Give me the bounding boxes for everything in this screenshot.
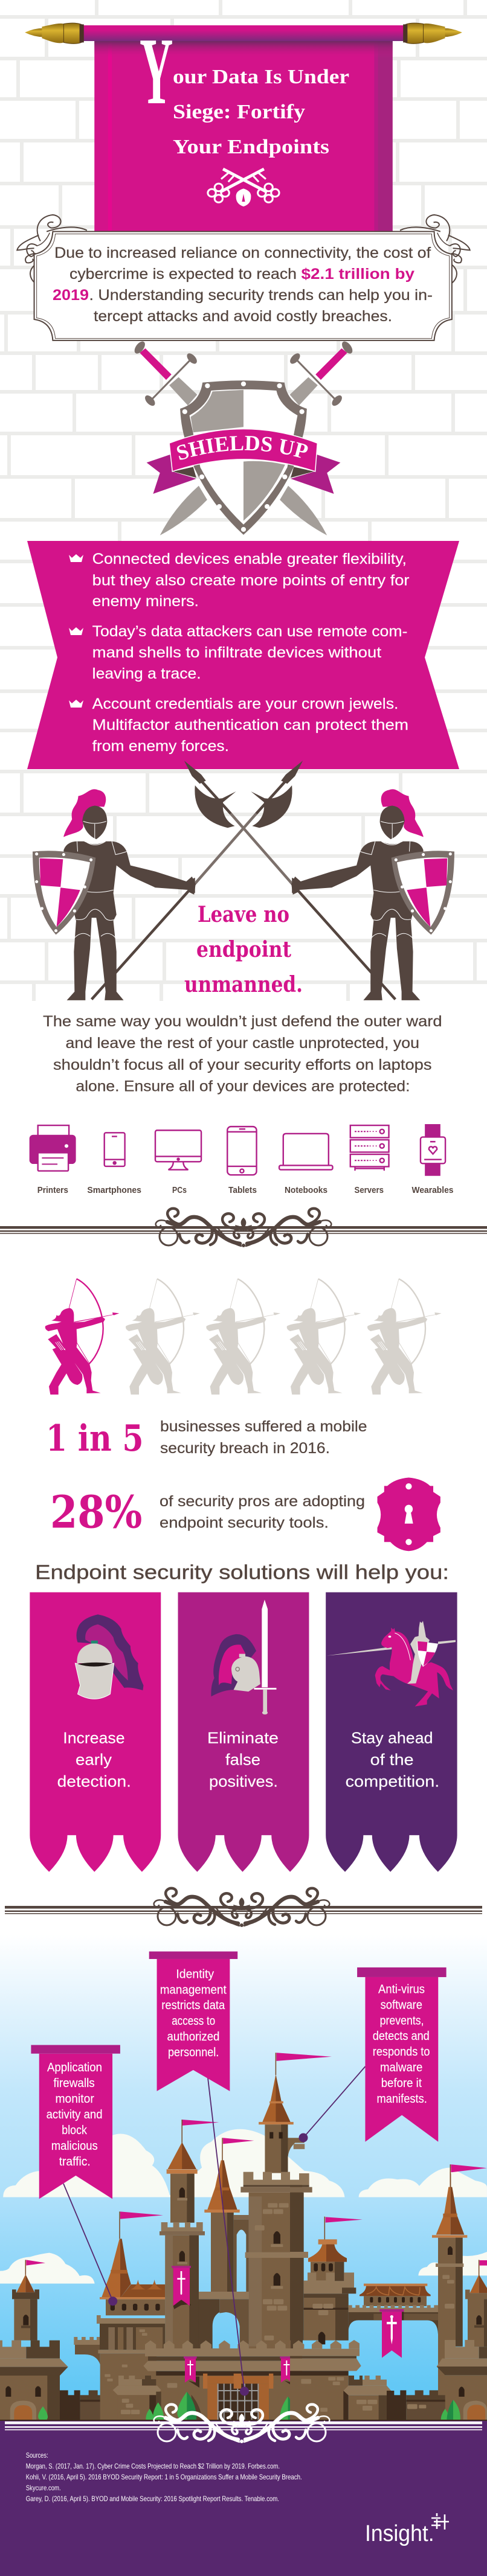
icon: wearable — [421, 1124, 445, 1176]
sky background — [0, 1935, 487, 2421]
frame — [34, 232, 452, 340]
panel: increase early detection — [30, 1593, 161, 1872]
callout: anti-virus: detects and — [373, 2030, 430, 2043]
trees — [146, 2392, 296, 2421]
side turret — [74, 2337, 100, 2345]
stat: 1 in 5: 1 in 5 — [46, 1417, 144, 1460]
title: our Data Is Under — [173, 66, 349, 88]
callout: identity management: management — [160, 1984, 227, 1997]
callout: application firewalls: traffic. — [59, 2155, 91, 2169]
banner text: positives. — [209, 1772, 278, 1791]
callout: anti-virus: software — [381, 1998, 422, 2012]
heading: endpoint solutions: Endpoint security solutions will help you: — [35, 1561, 449, 1583]
text block: defend devices — [43, 1013, 442, 1095]
Insight logo: Insight. — [365, 2521, 434, 2546]
callout: application firewalls: block — [62, 2124, 88, 2137]
callout: anti-virus: Anti-virus — [378, 1983, 425, 1996]
title: Your Endpoints — [173, 136, 329, 158]
device labels: Smartphones — [87, 1186, 141, 1195]
heading: leave no endpoint unmanned — [184, 902, 303, 997]
banner text: Eliminate — [207, 1729, 279, 1747]
main tower side — [299, 2173, 309, 2185]
callout: application firewalls: Application — [47, 2061, 102, 2074]
icon: servers — [350, 1125, 389, 1171]
brick wall lower fade cover — [0, 1001, 487, 1013]
hall spire and roof — [119, 2211, 120, 2239]
banner text: detection. — [57, 1772, 131, 1791]
stat: 28% — [50, 1486, 365, 1538]
stat: 28%: 28% — [50, 1486, 142, 1538]
banner text — [57, 1729, 131, 1791]
right knight — [184, 761, 454, 1000]
ornamental divider 2 — [5, 1888, 482, 1927]
callout: application firewalls: activity and — [47, 2108, 103, 2121]
hall body — [97, 2315, 165, 2324]
bullet 3: Account credentials are your crown jewels. — [92, 695, 398, 712]
device labels — [37, 1186, 453, 1195]
icon: smartphone — [105, 1133, 125, 1166]
callout: application firewalls: firewalls — [53, 2077, 95, 2090]
text block: defend devices: The same way you wouldn’t just defend the outer ward — [43, 1013, 442, 1030]
bullet 3 — [69, 695, 408, 755]
ribbon — [147, 429, 340, 494]
heading: leave no endpoint unmanned: endpoint — [196, 937, 291, 962]
title: Siege: Fortify — [173, 101, 305, 123]
bullet 1: Connected devices enable greater flexibility, — [92, 551, 407, 567]
sources: Sources: — [26, 2451, 48, 2459]
bullet 1: enemy miners. — [92, 593, 199, 610]
callout: anti-virus: before it — [381, 2077, 422, 2090]
bullet 3: from enemy forces. — [92, 738, 229, 755]
stat: 1 in 5 — [46, 1417, 367, 1460]
corner ornaments — [17, 215, 470, 283]
callout: identity management: access to — [172, 2015, 215, 2028]
icon: crossed keys — [208, 169, 279, 206]
left knight — [33, 761, 303, 1000]
right gold finial — [403, 23, 462, 43]
small towerlet — [118, 2376, 142, 2386]
icon: helmet with plume — [75, 1614, 143, 1699]
stat: 1 in 5: security breach in 2016. — [160, 1440, 330, 1457]
tower C — [207, 2160, 222, 2210]
stones and tree — [301, 2377, 426, 2412]
intro text: $2.1 trillion by — [301, 266, 414, 283]
tower E — [450, 2173, 451, 2187]
low walls — [60, 2390, 80, 2421]
text block: defend devices: alone. Ensure all of your devices are protected: — [76, 1078, 410, 1095]
callout: anti-virus: manifests. — [377, 2092, 427, 2106]
callout: application firewalls: malicious — [51, 2140, 98, 2153]
device labels: Servers — [354, 1186, 384, 1195]
intro text: cybercrime is expected to reach — [69, 266, 297, 283]
icon: keyhole badge — [378, 1477, 440, 1551]
Insight logo — [365, 2513, 449, 2546]
banner text: competition. — [346, 1772, 439, 1791]
far-left tower — [25, 2260, 26, 2275]
right towerlet — [349, 2376, 363, 2386]
intro text — [53, 244, 433, 325]
connecting wall and arch — [199, 2292, 249, 2299]
pagoda tower — [324, 2217, 325, 2240]
left and centre castle — [0, 2160, 304, 2421]
banner text: Stay ahead — [351, 1729, 433, 1747]
icon: shield with crossed swords and ribbon — [134, 342, 353, 535]
main tower — [244, 2172, 302, 2185]
icon: helmet and sword — [211, 1600, 276, 1715]
device icons row — [30, 1124, 453, 1195]
heading: leave no endpoint unmanned: unmanned. — [184, 972, 303, 997]
footer panel — [0, 2421, 487, 2576]
intro text: . Understanding security trends can help you in- — [89, 287, 433, 304]
crossed swords — [132, 340, 355, 535]
stat: 28%: endpoint security tools. — [160, 1514, 329, 1531]
callout: identity management: Identity — [176, 1967, 214, 1981]
device labels: Tablets — [228, 1186, 257, 1195]
banner text: of the — [370, 1751, 414, 1769]
stat: 1 in 5: businesses suffered a mobile — [160, 1418, 367, 1435]
ornamental divider 3 — [5, 2405, 482, 2443]
banner text: false — [225, 1751, 260, 1769]
panel: title scroll — [25, 18, 462, 232]
ribbon text: SHIELDS UP — [176, 436, 308, 460]
title — [140, 18, 349, 158]
device labels: Wearables — [412, 1186, 453, 1195]
upper towers — [168, 2053, 487, 2188]
curtain wall end — [293, 2340, 360, 2349]
hanging banners — [172, 2266, 295, 2388]
left gold finial — [25, 23, 84, 43]
callout: identity management: restricts data — [161, 1999, 225, 2012]
bridge roof — [360, 2286, 431, 2296]
right castle — [290, 2173, 487, 2421]
stone details — [105, 2329, 177, 2414]
device labels: Notebooks — [285, 1186, 327, 1195]
sources: Skycure.com. — [26, 2484, 61, 2492]
callout: identity management: personnel. — [168, 2046, 219, 2059]
callout: anti-virus — [357, 1967, 447, 2142]
intro text: tercept attacks and avoid costly breaches. — [94, 308, 392, 325]
gatehouse — [203, 2374, 274, 2421]
callout: identity management: authorized — [167, 2030, 219, 2044]
scroll cloth — [94, 41, 393, 232]
callout: anti-virus: prevents, — [380, 2014, 424, 2027]
bullet 2: leaving a trace. — [92, 665, 201, 682]
panel: stay ahead of the competition — [326, 1593, 457, 1872]
ground line — [0, 2420, 487, 2421]
hall window band — [106, 2300, 165, 2315]
brick wall background — [0, 0, 487, 1001]
archer pictogram row: 1 in 5 — [45, 1279, 442, 1395]
callout: anti-virus: malware — [380, 2061, 422, 2074]
sources — [26, 2451, 302, 2503]
sources: Garey, D. (2016, April 5). BYOD and Mobile Security: 2016 Spotlight Report Results. Tenable.com. — [26, 2495, 279, 2503]
tower B — [167, 2169, 198, 2174]
stat: 28%: of security pros are adopting — [160, 1493, 365, 1510]
panel: intro frame — [17, 215, 470, 340]
panel: shields up bullets — [27, 541, 459, 769]
intro text: Due to increased reliance on connectivity, the cost of — [54, 244, 431, 261]
callout: identity management — [149, 1951, 237, 2091]
sources: Morgan, S. (2017, Jan. 17). Cyber Crime Costs Projected to Reach $2 Trillion by 2019. Forbes.com. — [26, 2462, 280, 2470]
bullet 1: but they also create more points of entry for — [92, 572, 409, 589]
callout leader lines — [63, 2066, 365, 2395]
panel: eliminate false positives — [178, 1593, 309, 1872]
shield — [180, 380, 307, 535]
icon: PC — [155, 1130, 201, 1170]
bullet 2 — [69, 623, 407, 682]
clouds — [0, 2129, 487, 2284]
callout: application firewalls — [31, 2045, 120, 2199]
callout: application firewalls: monitor — [56, 2092, 94, 2106]
device labels: Printers — [37, 1186, 68, 1195]
banner text: Increase — [63, 1729, 125, 1747]
text block: defend devices: shouldn’t focus all of your security efforts on laptops — [53, 1056, 432, 1073]
icon: notebook — [279, 1134, 332, 1170]
far-right block — [445, 2340, 479, 2359]
intro text: 2019 — [53, 287, 89, 304]
castle illustration — [0, 2053, 487, 2421]
bullet 2: mand shells to infiltrate devices without — [92, 644, 381, 661]
callout: anti-virus: responds to — [373, 2045, 430, 2059]
banner text: early — [76, 1751, 112, 1769]
curtain wall — [145, 2341, 304, 2348]
far-right small tower — [479, 2260, 480, 2276]
bullet 2: Today’s data attackers can use remote com- — [92, 623, 407, 640]
ornamental divider 1 — [0, 1209, 487, 1247]
knights with crossed halberds — [33, 761, 454, 1000]
icon: knight on horseback — [326, 1621, 456, 1707]
right low walls — [387, 2390, 406, 2421]
banner text — [346, 1729, 439, 1791]
text block: defend devices: and leave the rest of your castle unprotected, you — [65, 1035, 419, 1052]
icon: printer — [30, 1125, 75, 1171]
sources: Kohli, V. (2016, April 5). 2016 BYOD Security Report: 1 in 5 Organizations Suffer a Mobile Security Breach. — [26, 2473, 302, 2481]
scroll rod — [80, 25, 407, 41]
banner text — [207, 1729, 279, 1791]
icon: tablet — [227, 1127, 257, 1175]
bullet 3: Multifactor authentication can protect them — [92, 717, 408, 733]
heading: leave no endpoint unmanned: Leave no — [198, 902, 289, 927]
device labels: PCs — [172, 1186, 187, 1195]
title: Y — [140, 18, 173, 124]
hanging bridge banner — [379, 2309, 404, 2358]
bullet 1 — [69, 551, 410, 610]
